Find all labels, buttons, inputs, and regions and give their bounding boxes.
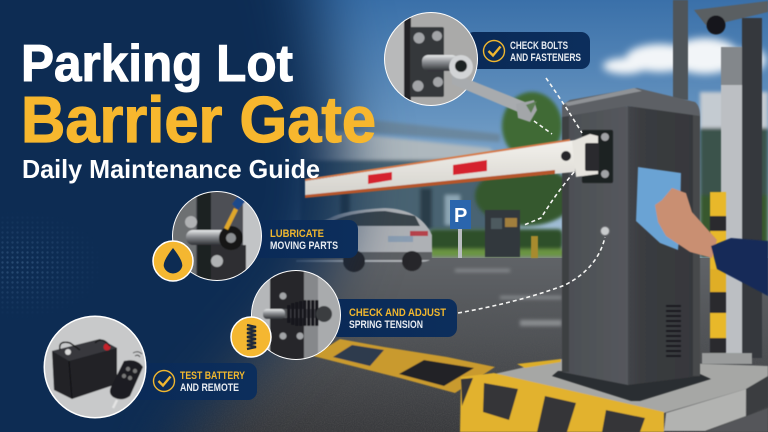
label text <box>349 307 446 331</box>
label text: TEST BATTERY <box>180 370 246 382</box>
parking sign <box>450 200 471 258</box>
halftone dots <box>2 226 84 304</box>
label text: MOVING PARTS <box>270 240 338 252</box>
title line 2: Barrier Gate <box>21 83 376 156</box>
label text: SPRING TENSION <box>349 319 423 331</box>
trees and hedge <box>428 92 575 261</box>
callout: check bolts <box>384 12 590 122</box>
speed bump <box>313 339 495 393</box>
photo inset: spring <box>251 270 342 360</box>
blue cloth <box>636 167 681 250</box>
check icon <box>154 370 174 392</box>
label text: LUBRICATE <box>270 228 324 240</box>
check icon <box>484 40 504 62</box>
label text: AND REMOTE <box>180 382 239 394</box>
road markings <box>455 269 562 326</box>
callout: lubricate <box>153 191 358 281</box>
photo inset: bolts and wrench <box>384 12 478 106</box>
clouds <box>603 38 766 74</box>
title <box>21 35 376 184</box>
icon: spring <box>231 317 271 357</box>
road surface <box>0 258 768 432</box>
distant building canopy <box>300 112 505 230</box>
spring access screw <box>600 226 610 236</box>
label text <box>270 228 338 252</box>
label text: CHECK AND ADJUST <box>349 307 446 319</box>
icon: oil drop <box>153 241 193 281</box>
navy sleeve <box>711 238 768 296</box>
navy overlay left <box>0 0 391 432</box>
label pill <box>330 299 457 337</box>
label text: AND FASTENERS <box>510 52 581 64</box>
small bollard <box>531 236 538 258</box>
cabinet base plate <box>552 371 711 401</box>
label pill <box>130 363 257 400</box>
label pill <box>465 32 590 69</box>
parking sign: P <box>454 205 467 227</box>
title line 1: Parking Lot <box>21 35 293 93</box>
right side building <box>700 92 768 258</box>
concrete curb with stripes <box>460 359 768 432</box>
barrier arm <box>305 130 613 198</box>
subtitle: Daily Maintenance Guide <box>22 154 320 184</box>
hand <box>655 188 717 258</box>
cleaning cloth and hand <box>636 167 768 296</box>
label pill <box>250 220 358 258</box>
pay kiosk <box>485 210 520 257</box>
cabinet vent <box>666 305 681 357</box>
wrench <box>449 55 537 122</box>
right poles and camera <box>673 0 768 358</box>
label text <box>510 40 581 64</box>
photo inset: lubrication <box>172 191 262 281</box>
connector dashed lines <box>458 78 605 313</box>
gate cabinet <box>552 88 711 401</box>
label text: CHECK BOLTS <box>510 40 568 52</box>
callout: spring <box>231 270 457 360</box>
callout: battery and remote <box>44 316 257 419</box>
photo inset: battery and remote <box>44 316 147 419</box>
striped safety post <box>702 192 752 364</box>
label text <box>180 370 246 394</box>
car <box>296 208 432 272</box>
